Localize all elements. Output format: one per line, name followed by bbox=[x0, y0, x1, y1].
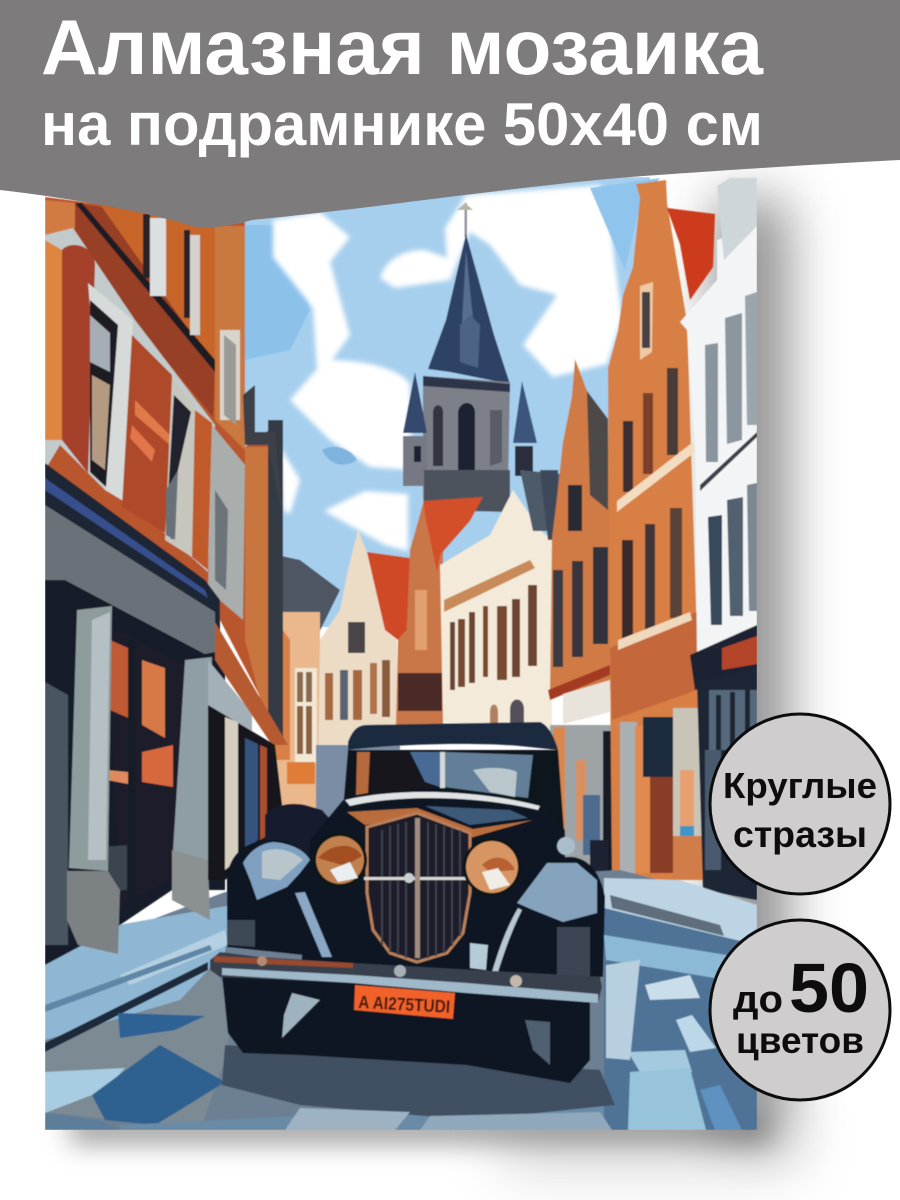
right headlight bbox=[463, 838, 521, 896]
subtitle: на подрамнике 50x40 см bbox=[41, 91, 763, 158]
far background buildings bbox=[270, 497, 483, 845]
canvas shadow bbox=[70, 200, 800, 1170]
left shopfronts bbox=[45, 463, 288, 965]
pedestrians behind the car bbox=[264, 803, 330, 856]
body reflections bbox=[282, 993, 320, 1038]
car roof and cabin bbox=[343, 721, 564, 830]
central church tower bbox=[403, 203, 537, 512]
left fender bbox=[227, 840, 332, 958]
licence plate bbox=[354, 985, 455, 1019]
badge: up to 50 colours: до bbox=[733, 979, 783, 1021]
left headlight bbox=[313, 833, 367, 887]
radiator grille bbox=[364, 813, 470, 962]
title: Алмазная мозаика bbox=[41, 3, 764, 91]
white building on the right bbox=[680, 178, 757, 900]
licence plate: A AI275TUDI bbox=[358, 992, 451, 1017]
painting: vintage car on a city street bbox=[45, 177, 757, 1130]
hood bbox=[345, 792, 540, 838]
badge: round rhinestones: Круглые bbox=[723, 765, 877, 806]
street bbox=[45, 870, 757, 1130]
sky with clouds bbox=[230, 177, 660, 627]
mid brick building bbox=[540, 359, 613, 872]
badge: up to 50 colours bbox=[710, 920, 890, 1100]
vintage car bbox=[210, 722, 605, 1083]
white central gabled building bbox=[440, 470, 560, 730]
badge: up to 50 colours: цветов bbox=[736, 1020, 864, 1061]
banner background bbox=[0, 0, 900, 228]
front bumper bbox=[210, 952, 602, 1003]
left brick building bbox=[45, 197, 283, 740]
car body between the fenders bbox=[300, 788, 565, 985]
badge: up to 50 colours: 50 bbox=[789, 949, 869, 1027]
top banner bbox=[0, 0, 900, 228]
right fender bbox=[470, 837, 605, 977]
car body lower bbox=[222, 975, 590, 1083]
badge: round rhinestones bbox=[710, 714, 890, 894]
orange gabled building bbox=[608, 180, 715, 880]
badge: round rhinestones: стразы bbox=[733, 814, 867, 855]
